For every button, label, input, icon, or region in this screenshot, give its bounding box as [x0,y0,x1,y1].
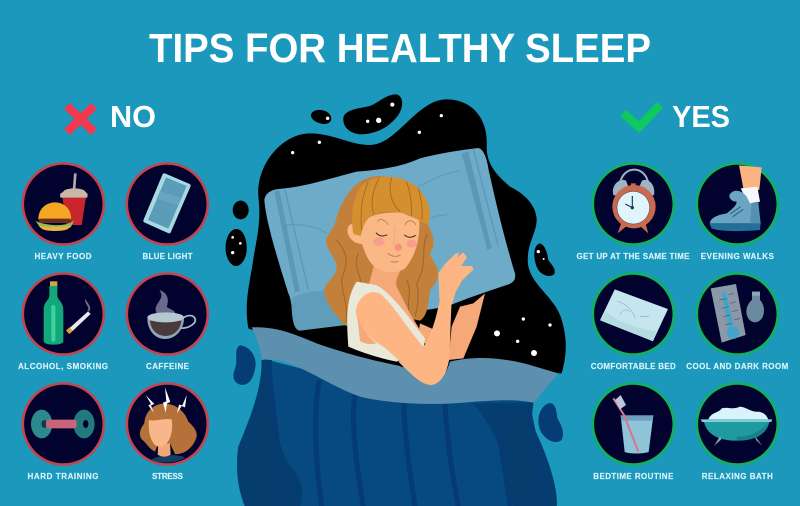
label: COMFORTABLE BED [591,362,676,371]
label: EVENING WALKS [701,252,774,261]
panel: get up at the same time [576,164,690,261]
panel: central sleeping woman illustration [226,94,566,506]
panel: evening walks [697,164,778,261]
blanket [233,327,563,506]
label: ALCOHOL, SMOKING [18,362,108,371]
panel: cool and dark room [686,274,789,371]
label: GET UP AT THE SAME TIME [576,252,690,261]
blanket blobs [233,345,563,442]
label: COOL AND DARK ROOM [686,362,789,371]
icon: phone [145,175,189,231]
panel: relaxing bath [697,384,778,481]
icon: coffee cup [147,290,195,339]
label: RELAXING BATH [702,472,773,481]
chest skin [417,323,435,343]
woman [324,176,485,385]
panel: comfortable bed [591,274,676,371]
title: TIPS FOR HEALTHY SLEEP [149,25,651,71]
night sky blob [226,94,566,373]
label: HEAVY FOOD [34,252,92,261]
face and ear [347,212,419,272]
panel: bedtime routine [593,384,674,481]
panel: hard training [23,384,104,481]
panel: caffeine [127,274,208,371]
icon: red cross [67,106,94,132]
icon: pillow [601,290,667,341]
icon: walking shoe [709,165,762,231]
near arm over blanket edge [398,343,449,385]
top [347,282,425,362]
hand [439,253,473,303]
panel: blue light [127,164,208,261]
label: STRESS [152,472,184,481]
panel: alcohol, smoking [18,274,108,371]
NO heading [67,99,156,134]
arm shadow [357,317,377,344]
label: CAFFEINE [146,362,190,371]
icon: alarm clock [612,170,656,233]
far arm [448,293,485,360]
label: BLUE LIGHT [142,252,193,261]
YES heading [623,99,730,134]
icon: bottle and cigarette [44,281,91,345]
closed eyes, brows, cheeks, nose and smile [373,219,417,262]
YES heading: YES [672,99,730,134]
panel: heavy food [23,164,104,261]
pillow [264,148,515,331]
near arm [356,292,452,385]
NO heading: NO [110,99,156,134]
icon: stressed woman [140,387,197,463]
icon: green check [623,105,660,127]
icon: bathtub with foam [701,407,772,446]
stars [231,103,552,356]
icon: burger and drink [35,173,88,231]
hair back [324,176,438,326]
icon: dumbbell [31,410,95,438]
neck [368,265,420,330]
icon: thermometer and bulb [711,284,764,343]
bangs [352,177,430,236]
icon: toothbrush in glass [613,395,653,453]
label: BEDTIME ROUTINE [593,472,674,481]
label: HARD TRAINING [28,472,98,481]
panel: stress [127,384,208,481]
